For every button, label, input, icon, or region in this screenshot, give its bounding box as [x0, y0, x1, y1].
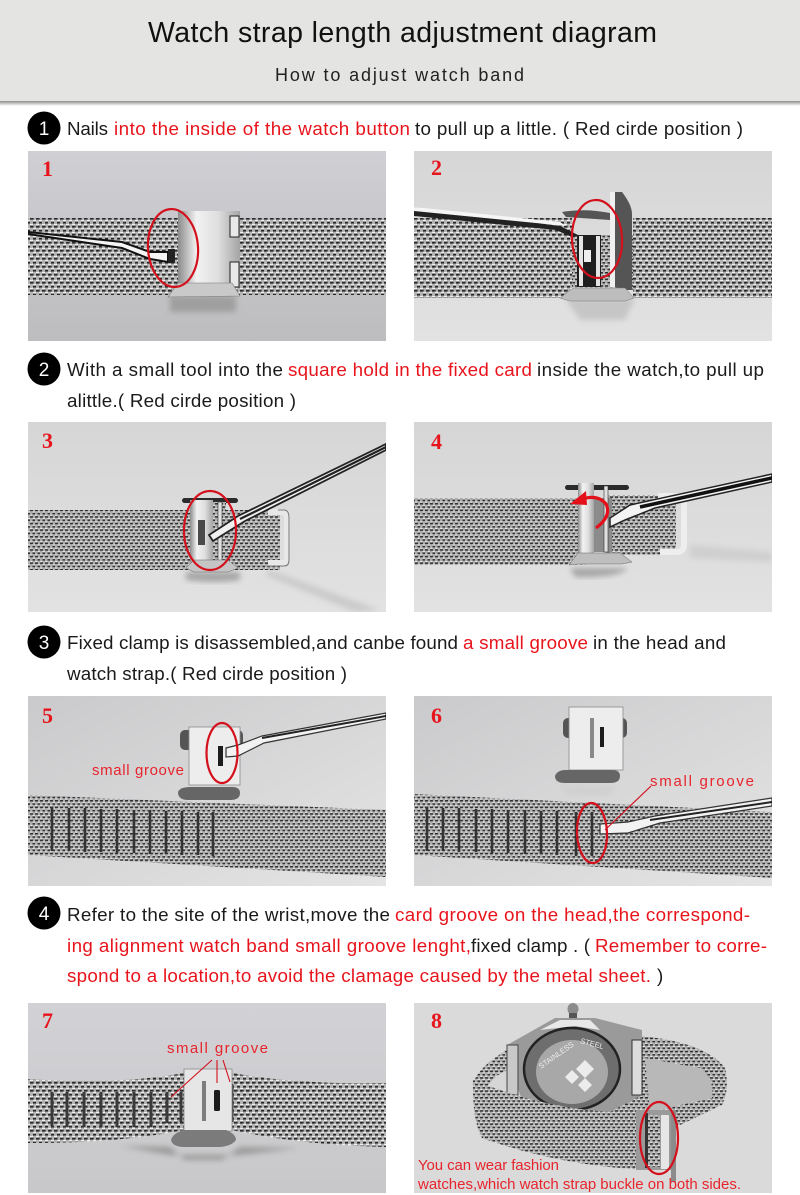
red circle	[206, 723, 238, 783]
groove label with leader: small groove	[650, 773, 754, 790]
step 1 instruction: 1	[39, 119, 49, 140]
step 4 instruction: )	[657, 965, 663, 986]
step 4 instruction: Remember to corre-	[595, 935, 767, 956]
step 4 instruction	[28, 896, 767, 986]
step 3 instruction: a small groove	[463, 632, 588, 653]
panel 1: tool at the clasp edge	[28, 151, 386, 341]
panel 8: finished watch	[414, 1003, 772, 1193]
red circle	[145, 207, 201, 289]
step 3 instruction: in the head and	[593, 632, 726, 653]
watch case	[507, 1003, 642, 1112]
step number 3: 3	[42, 428, 53, 453]
groove label with leaders	[167, 1040, 268, 1097]
panel 5: clasp off, groove on head	[28, 696, 386, 886]
groove label with leaders: small groove	[167, 1040, 268, 1057]
panel 4: clasp lifting with arrow	[414, 422, 772, 612]
step 4 instruction: Refer to the site of the wrist,move the	[67, 904, 390, 925]
step 4 instruction: ing alignment watch band small groove lenght,	[67, 935, 471, 956]
step number 6: 6	[431, 703, 442, 728]
step 4 instruction: 4	[39, 904, 50, 925]
caption: You can wear fashion	[418, 1157, 559, 1174]
step number 1: 1	[42, 156, 53, 181]
step number 2: 2	[431, 155, 442, 180]
step 2 instruction: With a small tool into the	[67, 359, 283, 380]
groove label with leader	[605, 773, 754, 830]
front mesh band	[473, 1080, 648, 1170]
step number 7: 7	[42, 1008, 53, 1033]
step 4 instruction: spond to a location,to avoid the clamage caused by the metal sheet.	[67, 965, 651, 986]
step 3 instruction	[28, 626, 726, 684]
red curved arrow	[570, 491, 608, 528]
step 4 instruction: fixed clamp . (	[471, 935, 591, 956]
step 2 instruction: 2	[39, 360, 49, 381]
watch case: STAINLESS	[537, 1040, 576, 1071]
step 3 instruction: Fixed clamp is disassembled,and canbe found	[67, 632, 458, 653]
step 2 instruction: alittle.( Red cirde position )	[67, 390, 296, 411]
header banner	[0, 0, 800, 106]
red circle	[570, 199, 624, 279]
groove label: small groove	[92, 762, 184, 779]
step 1 instruction: into the inside of the watch button	[114, 118, 410, 139]
step 2 instruction: inside the watch,to pull up	[537, 359, 764, 380]
step number 8: 8	[431, 1008, 442, 1033]
red circle	[184, 491, 236, 570]
caption	[417, 1157, 741, 1193]
panel 7: clamp aligned on strap	[28, 1003, 386, 1193]
step number 5: 5	[42, 703, 53, 728]
step 3 instruction: watch strap.( Red cirde position )	[66, 663, 347, 684]
step number 4: 4	[431, 429, 442, 454]
title: Watch strap length adjustment diagram	[148, 17, 657, 49]
step 1 instruction: to pull up a little. ( Red cirde position )	[415, 118, 743, 139]
watch case: STEEL	[579, 1036, 605, 1051]
subtitle: How to adjust watch band	[275, 65, 524, 85]
step 1 instruction: Nails	[67, 118, 108, 139]
panel 6: groove on strap	[414, 696, 772, 886]
red circle	[640, 1102, 678, 1174]
buckle	[636, 1110, 676, 1182]
panel 3: tool in square hole	[28, 422, 386, 612]
rear band	[473, 1036, 727, 1125]
step 1 instruction	[28, 112, 743, 144]
red circle	[576, 802, 608, 864]
step 2 instruction	[28, 352, 764, 411]
step 4 instruction: card groove on the head,the correspond-	[395, 904, 750, 925]
panel 2: clasp lifted	[414, 151, 772, 341]
step 3 instruction: 3	[39, 633, 49, 654]
step 2 instruction: square hold in the fixed card	[288, 359, 532, 380]
caption: watches,which watch strap buckle on both sides.	[417, 1176, 741, 1193]
